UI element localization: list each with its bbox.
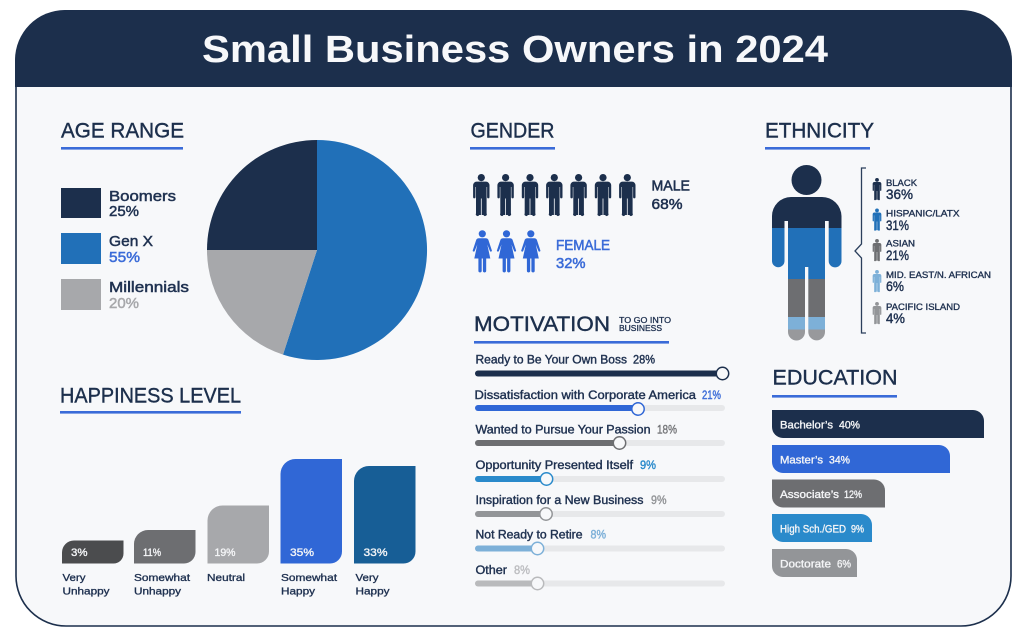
- bar: associate's: [772, 480, 885, 508]
- bar: high school: High Sch./GED: [780, 524, 846, 536]
- item: middle east: 6%: [886, 278, 904, 294]
- item: hispanic: [873, 208, 960, 233]
- slider: not ready to retire: Not Ready to Retire: [476, 530, 582, 542]
- bar: neutral: [207, 506, 269, 584]
- legend: boomers: 25%: [109, 203, 139, 220]
- slider: opportunity: [475, 460, 725, 485]
- item: hispanic: HISPANIC/LATX: [886, 208, 960, 220]
- heading: motivation: TO GO INTO: [619, 316, 671, 325]
- bar: somewhat unhappy: Unhappy: [134, 586, 182, 598]
- bar: master's: [772, 445, 950, 473]
- item: asian: 21%: [886, 247, 909, 263]
- heading: motivation: [474, 313, 671, 344]
- item: hispanic: 31%: [886, 217, 909, 233]
- title: Small Business Owners in 2024: [202, 29, 828, 71]
- slider: opportunity: Opportunity Presented Itself: [476, 460, 634, 472]
- slider: inspiration: 9%: [651, 495, 666, 507]
- bar: somewhat happy: [280, 459, 342, 598]
- bar: somewhat unhappy: 11%: [143, 547, 161, 559]
- bar: associate's: Associate’s: [780, 489, 840, 501]
- bar: somewhat unhappy: Somewhat: [134, 572, 190, 584]
- slider: passion: [475, 424, 725, 449]
- bar: bachelor's: [772, 410, 984, 438]
- heading: age range: AGE RANGE: [61, 120, 184, 142]
- item: asian: [873, 238, 915, 263]
- pie chart: [207, 140, 427, 360]
- heading: motivation: BUSINESS: [619, 324, 662, 333]
- slider: own boss: Ready to Be Your Own Boss: [476, 354, 627, 366]
- bracket: [855, 168, 866, 333]
- bar: bachelor's: Bachelor’s: [780, 420, 834, 432]
- slider: other: 8%: [514, 565, 530, 577]
- bar: doctorate: 6%: [837, 558, 851, 570]
- bar: very unhappy: Unhappy: [62, 586, 110, 598]
- legend: gen x: Gen X: [109, 233, 153, 250]
- heading: motivation: MOTIVATION: [474, 313, 610, 336]
- icons: male row: [473, 174, 636, 216]
- item: pacific island: [873, 302, 960, 326]
- item: middle east: [873, 270, 991, 294]
- slider: opportunity: 9%: [640, 460, 656, 472]
- panel: education: [772, 366, 984, 577]
- bar: neutral: 19%: [214, 547, 236, 559]
- bar: master's: 34%: [829, 454, 850, 466]
- label: female: 32%: [556, 256, 586, 272]
- label: male: MALE: [652, 178, 690, 194]
- panel: motivation: [474, 313, 729, 590]
- panel: age range: [61, 120, 427, 360]
- slider: inspiration: Inspiration for a New Business: [476, 495, 644, 507]
- slider: corporate america: Dissatisfaction with Corporate America: [474, 390, 697, 402]
- bar: doctorate: [772, 549, 857, 577]
- label: male: 68%: [652, 197, 683, 213]
- item: black: 36%: [886, 186, 913, 202]
- bar: bachelor's: 40%: [839, 420, 860, 432]
- legend: millennials: 20%: [109, 295, 139, 312]
- slider: passion: 18%: [657, 424, 677, 436]
- bar: doctorate: Doctorate: [780, 558, 831, 570]
- bar: somewhat unhappy: [134, 530, 196, 598]
- heading: ethnicity: ETHNICITY: [765, 120, 874, 142]
- bar: somewhat happy: 35%: [290, 547, 314, 559]
- item: black: [873, 178, 918, 202]
- slider: other: Other: [476, 565, 507, 577]
- legend: boomers: Boomers: [109, 188, 176, 205]
- slider: not ready to retire: [475, 530, 725, 555]
- figure: ethnicity body: [772, 165, 842, 340]
- heading: happiness level: HAPPINESS LEVEL: [60, 384, 241, 408]
- item: pacific island: PACIFIC ISLAND: [886, 302, 960, 313]
- bar: very happy: [354, 466, 416, 598]
- legend: boomers: [61, 188, 176, 220]
- panel: ethnicity: [765, 120, 991, 342]
- slider: not ready to retire: 8%: [590, 530, 606, 542]
- bar: associate's: 12%: [844, 489, 862, 501]
- slider: own boss: [475, 354, 729, 380]
- icons: female row: [473, 230, 540, 272]
- bar: very happy: Very: [356, 572, 379, 584]
- legend: gen x: [61, 233, 153, 266]
- slider: corporate america: [474, 390, 725, 415]
- slider: inspiration: [475, 495, 725, 520]
- label: male: [652, 178, 690, 213]
- bar: very unhappy: 3%: [71, 547, 88, 559]
- bar: very happy: Happy: [356, 586, 390, 598]
- label: female: [556, 238, 610, 272]
- slider: other: [475, 565, 725, 590]
- item: middle east: MID. EAST/N. AFRICAN: [886, 270, 991, 281]
- bar: somewhat happy: Somewhat: [281, 572, 337, 584]
- heading: education: EDUCATION: [772, 366, 898, 390]
- bar: master's: Master’s: [780, 454, 824, 466]
- legend: millennials: Millennials: [109, 279, 189, 296]
- slider: own boss: 28%: [633, 354, 655, 366]
- item: asian: ASIAN: [886, 238, 915, 250]
- item: pacific island: 4%: [886, 310, 905, 326]
- panel: gender: [470, 120, 690, 272]
- label: female: FEMALE: [556, 238, 610, 254]
- bar: high school: 9%: [851, 524, 864, 536]
- bar: very unhappy: [62, 540, 124, 598]
- heading: gender: GENDER: [470, 120, 554, 142]
- bar: high school: [772, 514, 872, 542]
- legend: millennials: [61, 279, 189, 312]
- slider: corporate america: 21%: [702, 390, 721, 402]
- item: black: BLACK: [886, 178, 918, 189]
- bar: very unhappy: Very: [62, 572, 86, 584]
- legend: gen x: 55%: [109, 249, 140, 266]
- bar: very happy: 33%: [364, 547, 388, 559]
- panel: happiness level: [60, 384, 416, 598]
- bar: neutral: Neutral: [207, 572, 245, 584]
- bar: somewhat happy: Happy: [281, 586, 316, 598]
- header band: [15, 10, 1012, 87]
- slider: passion: Wanted to Pursue Your Passion: [476, 424, 650, 436]
